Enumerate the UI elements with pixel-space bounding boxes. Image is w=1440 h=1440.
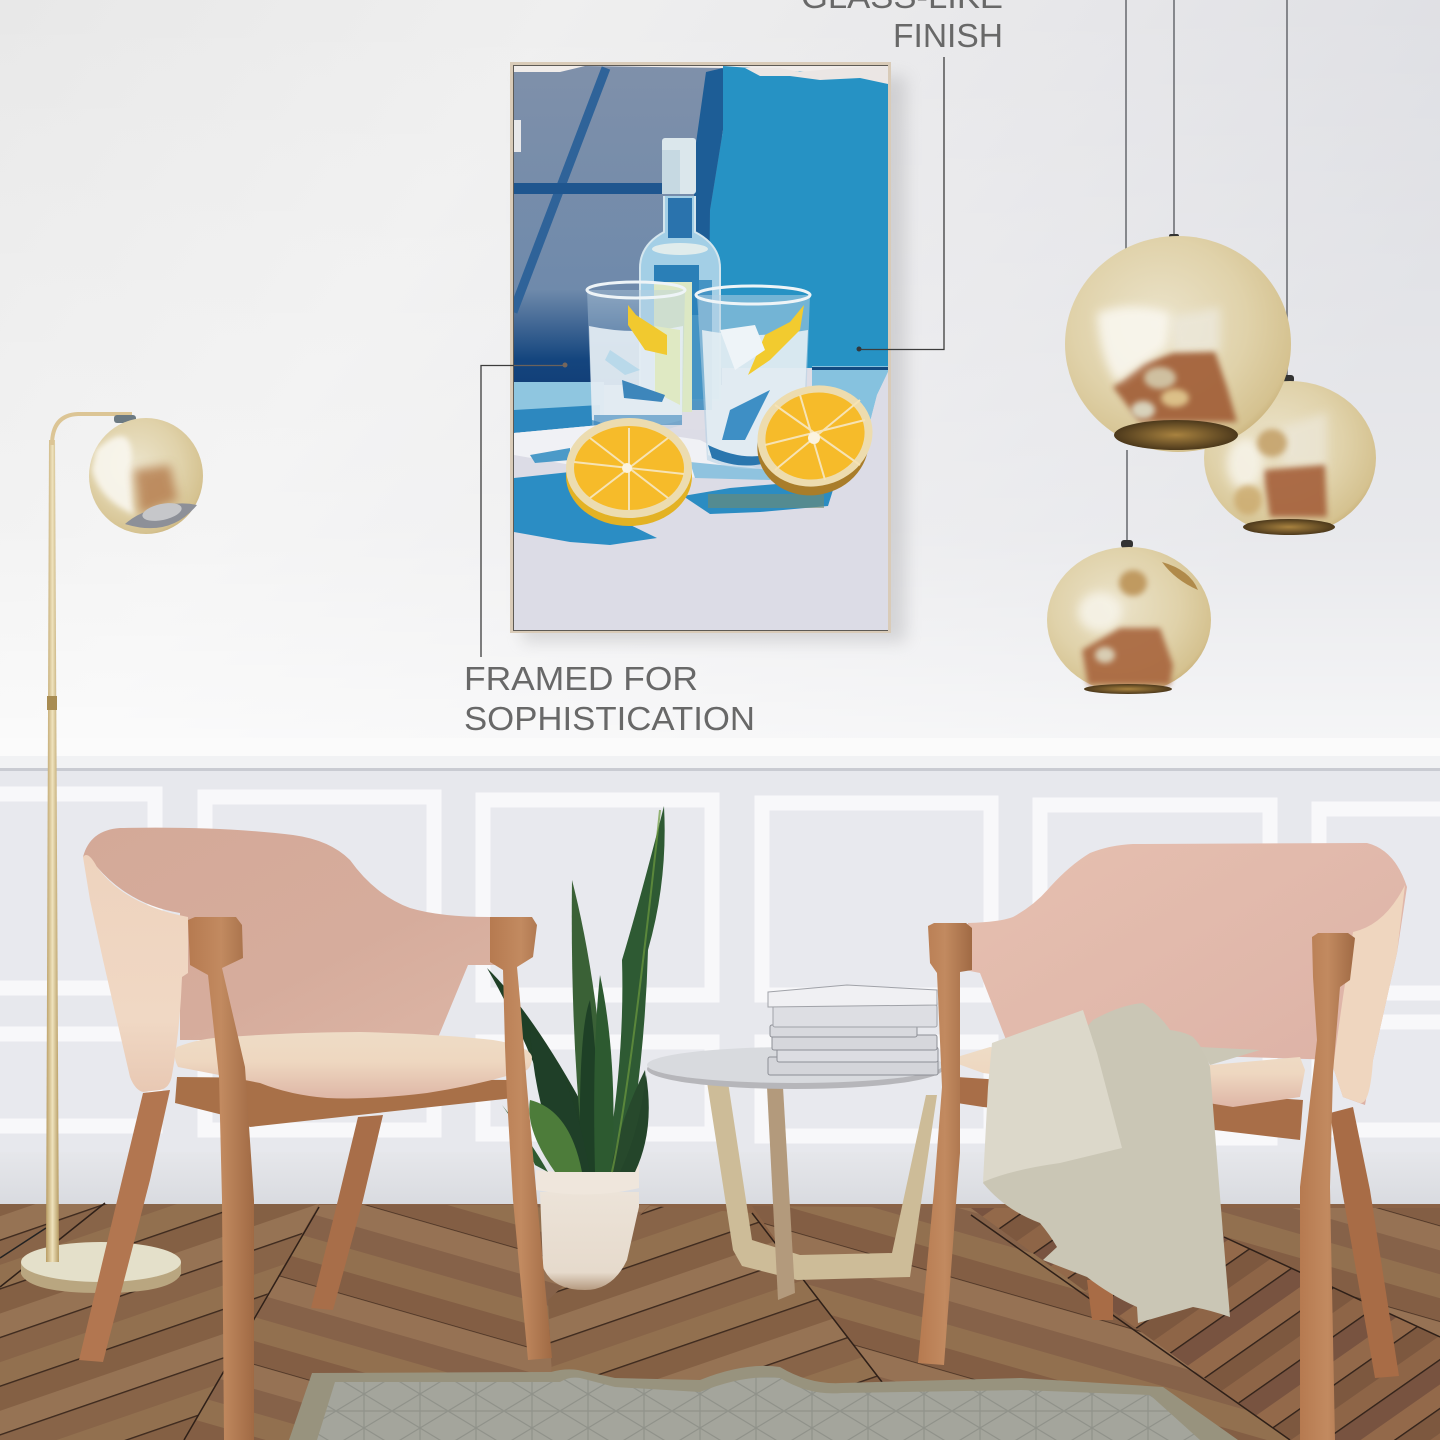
callout: glass-like finish bbox=[801, 0, 1003, 352]
front legs and arms bbox=[188, 917, 254, 1440]
pendant: lower globe bbox=[1047, 540, 1211, 694]
book stack bbox=[768, 985, 938, 1075]
plant leaves bbox=[487, 806, 665, 1172]
table top bbox=[647, 1049, 943, 1089]
window mullions bbox=[513, 68, 606, 312]
blanket flap bbox=[983, 1010, 1122, 1182]
table bbox=[514, 382, 604, 432]
throw blanket bbox=[983, 1003, 1260, 1323]
bottle bbox=[640, 138, 720, 412]
lamp pole bbox=[46, 440, 59, 1262]
lamp cords bbox=[1126, 0, 1287, 545]
seat bbox=[947, 1047, 1305, 1107]
lamp shade bbox=[89, 418, 203, 534]
left chair bbox=[79, 828, 552, 1440]
rug bbox=[289, 1366, 1238, 1440]
left lemon bbox=[566, 418, 692, 526]
seat rail bbox=[957, 1077, 1303, 1140]
right chair bbox=[918, 843, 1407, 1440]
lamp cord bbox=[0, 1228, 46, 1258]
callout: glass-like finish: FINISH bbox=[893, 17, 1003, 54]
seat rail bbox=[175, 1077, 513, 1127]
side table bbox=[647, 985, 943, 1300]
lamp neck bbox=[114, 415, 136, 423]
chair left wing bbox=[83, 855, 188, 1092]
lamp base bbox=[21, 1262, 181, 1293]
callout: framed for sophistication bbox=[464, 362, 755, 737]
blanket body bbox=[983, 1003, 1230, 1323]
right lemon bbox=[757, 385, 872, 496]
seat bbox=[175, 1032, 532, 1098]
herringbone wood floor bbox=[0, 1203, 1440, 1440]
wall bbox=[0, 0, 1440, 760]
plant pot bbox=[536, 1165, 639, 1290]
pendant lamps bbox=[1047, 0, 1376, 694]
chair back shell bbox=[965, 843, 1407, 1105]
framed painting bbox=[510, 62, 906, 642]
pendant: large globe bbox=[1065, 234, 1291, 452]
artwork bbox=[513, 66, 888, 630]
front legs and arms bbox=[918, 923, 972, 1365]
frame bbox=[510, 62, 891, 633]
callout: framed for sophistication: SOPHISTICATION bbox=[464, 700, 755, 737]
plant in pot bbox=[487, 806, 665, 1290]
left glass bbox=[587, 282, 685, 432]
back legs bbox=[79, 1090, 170, 1362]
callout: framed for sophistication: FRAMED FOR bbox=[464, 660, 698, 697]
chair right wing bbox=[1333, 885, 1405, 1103]
right glass bbox=[696, 286, 810, 469]
chair back shell bbox=[83, 828, 495, 1040]
table shadows bbox=[514, 472, 657, 545]
pendant: right small globe bbox=[1204, 375, 1376, 535]
top paint bbox=[514, 66, 882, 72]
wainscot panelling bbox=[0, 738, 1440, 1210]
frame shadow bbox=[522, 76, 906, 642]
back legs bbox=[1330, 1107, 1399, 1378]
floor lamp bbox=[0, 414, 203, 1293]
table frame legs bbox=[707, 1082, 937, 1280]
